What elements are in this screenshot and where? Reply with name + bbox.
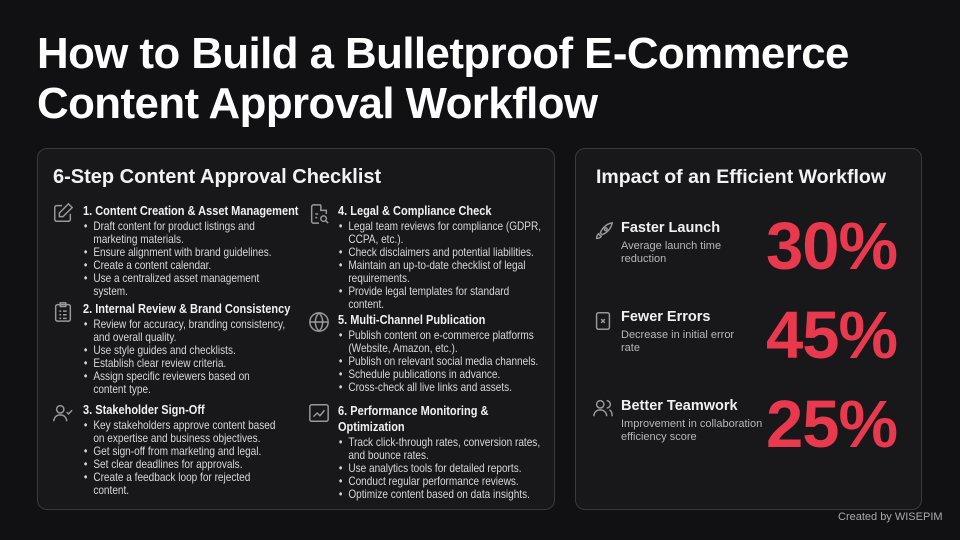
- step 3: Create a feedback loop for rejected: [93, 471, 250, 484]
- step 6: and bounce rates.: [348, 449, 429, 462]
- step 6: Use analytics tools for detailed reports.: [348, 462, 522, 475]
- title: How to Build a Bulletproof E-Commerce: [37, 29, 849, 78]
- step 5: Schedule publications in advance.: [348, 368, 500, 381]
- step 5: Cross-check all live links and assets.: [348, 381, 512, 394]
- step 1: [83, 203, 298, 298]
- step 3: Get sign-off from marketing and legal.: [93, 445, 261, 458]
- panel heading: checklist: 6-Step Content Approval Checklist: [53, 166, 381, 188]
- step 1: 1. Content Creation & Asset Management: [83, 203, 298, 218]
- stat: faster launch: Faster Launch: [621, 220, 720, 236]
- step 3: Set clear deadlines for approvals.: [93, 458, 243, 471]
- footer credit: Created by WISEPIM: [838, 511, 943, 523]
- step 2: 2. Internal Review & Brand Consistency: [83, 301, 290, 316]
- step 4: Legal team reviews for compliance (GDPR,: [348, 220, 541, 233]
- step 2: [83, 301, 290, 396]
- icon: rocket: [596, 222, 613, 240]
- number: 45%: 45%: [766, 298, 897, 373]
- step 6: Track click-through rates, conversion rates,: [348, 436, 540, 449]
- icon: edit: [54, 202, 74, 222]
- step 2: and overall quality.: [93, 331, 176, 344]
- step 5: Publish on relevant social media channels.: [348, 355, 538, 368]
- step 1: Draft content for product listings and: [93, 220, 255, 233]
- number: 30%: 30%: [766, 209, 897, 284]
- stat: faster launch: reduction: [621, 253, 666, 265]
- step 2: Use style guides and checklists.: [93, 344, 236, 357]
- stat: faster launch: Average launch time: [621, 240, 721, 252]
- stat: fewer errors: Fewer Errors: [621, 309, 710, 325]
- step 4: [338, 203, 541, 311]
- step 3: 3. Stakeholder Sign-Off: [83, 402, 205, 417]
- step 5: [338, 312, 538, 394]
- step 3: [83, 402, 275, 497]
- step 3: on expertise and business objectives.: [93, 432, 260, 445]
- icon: globe: [309, 312, 329, 332]
- number: 25%: 25%: [766, 387, 897, 462]
- step 4: requirements.: [348, 272, 410, 285]
- step 3: Key stakeholders approve content based: [93, 419, 275, 432]
- step 4: Provide legal templates for standard: [348, 285, 509, 298]
- step 5: Publish content on e-commerce platforms: [348, 329, 534, 342]
- step 1: Ensure alignment with brand guidelines.: [93, 246, 272, 259]
- stat: better teamwork: [593, 387, 897, 462]
- step 2: Assign specific reviewers based on: [93, 370, 250, 383]
- stat: fewer errors: rate: [621, 342, 640, 354]
- step 4: Maintain an up-to-date checklist of legal: [348, 259, 525, 272]
- step 6: 6. Performance Monitoring &: [338, 403, 488, 418]
- step 1: Create a content calendar.: [93, 259, 211, 272]
- stat: faster launch: [596, 209, 897, 284]
- stat: better teamwork: Improvement in collaboration: [621, 418, 762, 430]
- step 6: Conduct regular performance reviews.: [348, 475, 519, 488]
- stat: fewer errors: Decrease in initial error: [621, 329, 734, 341]
- title: Content Approval Workflow: [37, 79, 597, 128]
- icon: user check: [53, 404, 73, 422]
- step 1: marketing materials.: [93, 233, 184, 246]
- step 5: 5. Multi-Channel Publication: [338, 312, 485, 327]
- step 3: content.: [93, 484, 129, 497]
- title: [37, 29, 849, 128]
- step 4: Check disclaimers and potential liabilities.: [348, 246, 534, 259]
- step 6: Optimization: [338, 419, 405, 434]
- step 6: Optimize content based on data insights.: [348, 488, 530, 501]
- icon: users: [593, 400, 613, 416]
- stat: better teamwork: Better Teamwork: [621, 398, 738, 414]
- step 1: Use a centralized asset management: [93, 272, 259, 285]
- icon: document search: [310, 204, 329, 224]
- panel: impact: [575, 148, 922, 510]
- panel: checklist: [37, 148, 555, 510]
- step 4: content.: [348, 298, 384, 311]
- step 4: CCPA, etc.).: [348, 233, 403, 246]
- stat: better teamwork: efficiency score: [621, 431, 697, 443]
- panel heading: impact: Impact of an Efficient Workflow: [596, 166, 886, 188]
- step 2: content type.: [93, 383, 151, 396]
- icon: chart: [309, 404, 329, 422]
- step 1: system.: [93, 285, 128, 298]
- step 5: (Website, Amazon, etc.).: [348, 342, 458, 355]
- step 2: Review for accuracy, branding consistency,: [93, 318, 285, 331]
- stat: fewer errors: [596, 298, 897, 373]
- icon: clipboard: [54, 302, 72, 322]
- step 6: [338, 403, 540, 501]
- step 2: Establish clear review criteria.: [93, 357, 226, 370]
- icon: x file: [596, 312, 610, 330]
- step 4: 4. Legal & Compliance Check: [338, 203, 492, 218]
